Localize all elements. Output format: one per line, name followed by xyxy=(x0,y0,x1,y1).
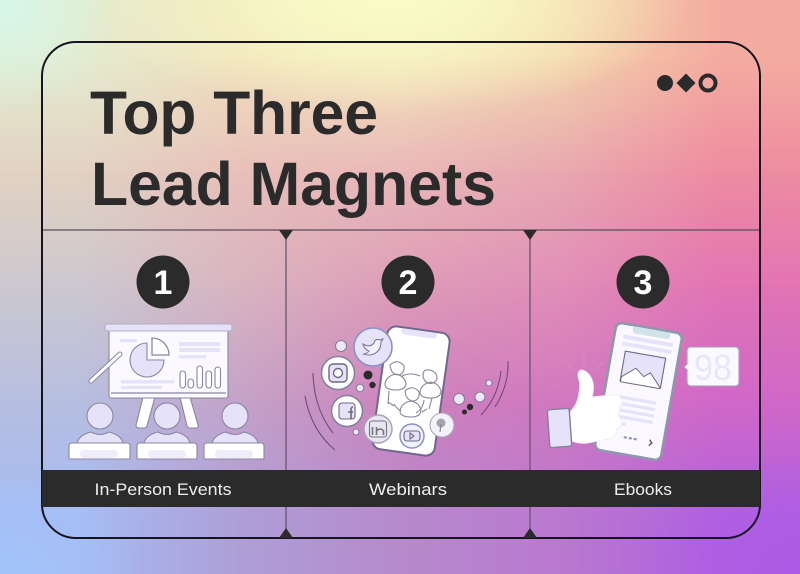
number badge 3 xyxy=(616,256,670,308)
ebook phone xyxy=(594,322,683,461)
rays xyxy=(564,352,604,372)
panel: outer frame xyxy=(42,42,760,538)
title xyxy=(90,79,496,218)
linkedin bubble xyxy=(364,415,392,443)
instagram bubble xyxy=(322,356,354,390)
label bar xyxy=(42,470,760,507)
text lines xyxy=(120,339,220,389)
title: Top Three xyxy=(90,79,378,147)
label: In-Person Events: In-Person Events xyxy=(94,481,232,499)
icon: phone with thumbs up and like count xyxy=(547,322,739,461)
cuff xyxy=(547,408,572,448)
group of people on phone xyxy=(385,362,441,417)
twitter bubble xyxy=(354,328,392,366)
thumb hand xyxy=(570,370,622,443)
easel legs xyxy=(136,397,198,428)
number badge 2 xyxy=(382,256,434,308)
label: Ebooks: Ebooks xyxy=(614,481,672,499)
phone xyxy=(371,325,451,457)
icon: phone with social media bubbles xyxy=(305,325,508,457)
label: Webinars: Webinars xyxy=(369,481,447,499)
number badge 1 xyxy=(136,256,190,308)
icon: circle diamond ring xyxy=(657,74,716,92)
person centre xyxy=(137,403,197,459)
title: Lead Magnets xyxy=(91,150,496,218)
motion arcs xyxy=(305,361,508,450)
youtube bubble xyxy=(400,424,424,448)
person left xyxy=(69,403,130,459)
decorative dots xyxy=(336,340,492,435)
pie chart xyxy=(130,343,164,377)
pinterest bubble xyxy=(430,413,454,437)
bars xyxy=(180,366,220,388)
number badge 2: 2 xyxy=(399,264,417,302)
pointer xyxy=(91,354,120,381)
number badge 1: 1 xyxy=(154,264,172,302)
number badge 3: 3 xyxy=(634,264,652,302)
board xyxy=(109,329,228,398)
person right xyxy=(204,403,264,459)
facebook bubble xyxy=(332,396,362,426)
like count bubble: 98 xyxy=(694,347,732,388)
icon: presentation board and audience xyxy=(69,324,264,459)
